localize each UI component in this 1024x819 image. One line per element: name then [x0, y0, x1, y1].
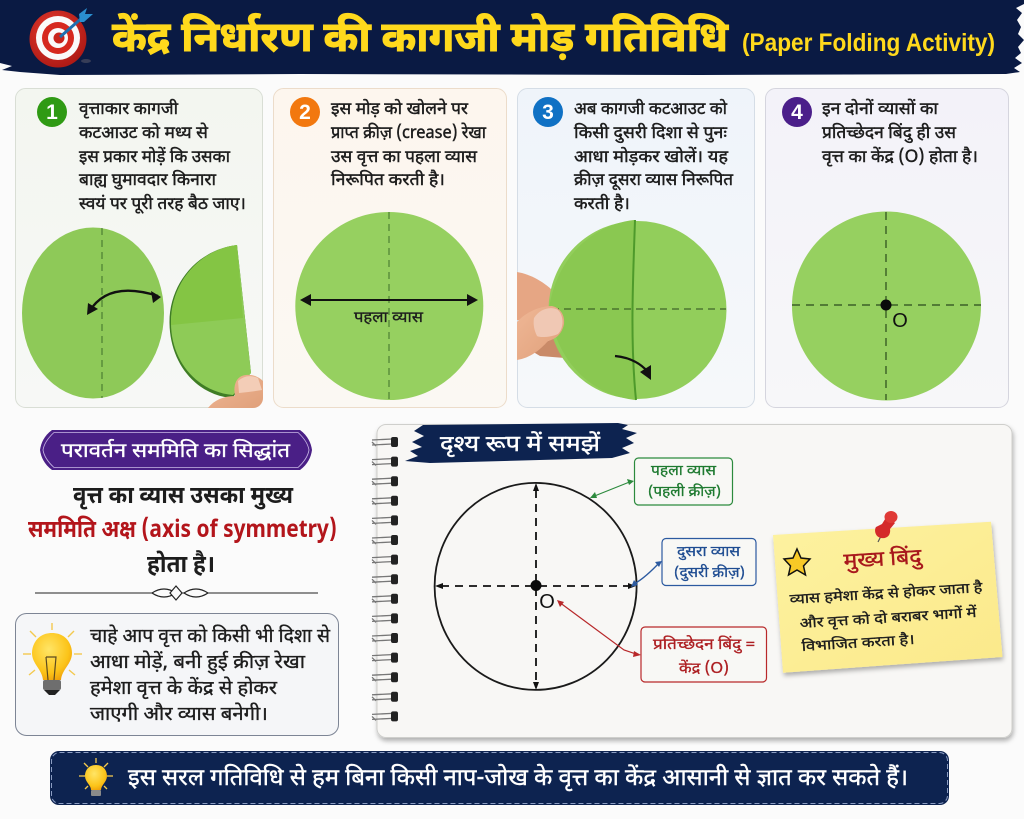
paper circle with first diameter [295, 212, 483, 400]
folded half circle [169, 245, 251, 398]
arrow: second diameter [631, 561, 662, 587]
subtitle: (Paper Folding Activity) [742, 29, 995, 57]
tip text: चाहे आप वृत्त को किसी भी दिशा से [90, 624, 331, 650]
step 1 text: कटआउट को मध्य से [79, 121, 209, 145]
step 2 text: निरूपित करती है। [331, 168, 445, 192]
icon: push pin [875, 511, 898, 542]
panel: step 3 [517, 88, 754, 408]
hand holding paper [208, 375, 263, 408]
main statement: होता है। [147, 550, 215, 582]
spiral binding [372, 437, 398, 721]
label: intersection point: केंद्र (O) [679, 659, 729, 680]
bottom takeaway bar [50, 751, 949, 805]
tip text [90, 624, 331, 728]
circle diagram [435, 483, 637, 690]
paper circle with fold line and arrow [22, 228, 164, 398]
panel: step 4 [766, 88, 1008, 408]
label: first diameter [634, 458, 732, 505]
key point text [789, 578, 984, 657]
step 4 text: प्रतिच्छेदन बिंदु ही उस [822, 121, 957, 145]
step 3 text: अब कागजी कटआउट को [574, 98, 728, 121]
step 2 text: प्राप्त क्रीज़ (crease) रेखा [331, 121, 487, 145]
circle diagram: O [539, 591, 555, 613]
main statement: सममिति अक्ष (axis of symmetry) [28, 515, 337, 547]
callout: tip box [16, 614, 338, 736]
arrow: intersection point [557, 600, 641, 657]
step number 3: 3 [542, 101, 554, 124]
step 2 text: इस मोड़ को खोलने पर [331, 97, 469, 121]
step 2 text: उस वृत्त का पहला व्यास [331, 147, 478, 169]
ornamental divider [35, 586, 318, 600]
label: second diameter [662, 538, 756, 586]
step number 1: 1 [46, 101, 58, 124]
heading: visual understanding: दृश्य रूप में समझें [440, 431, 600, 460]
main statement [28, 481, 337, 582]
icon: light bulb [79, 758, 113, 796]
step 3 text [574, 98, 733, 216]
paper circle with second fold [548, 220, 726, 400]
icon: star [784, 549, 810, 575]
step 3 text: किसी दुसरी दिशा से पुनः [574, 121, 728, 145]
step 4 text: इन दोनों व्यासों का [822, 98, 939, 121]
paper circle with both diameters and centre: O [892, 310, 908, 332]
heading: symmetry principle [40, 430, 312, 470]
panel: step 2 [274, 88, 506, 408]
tip text: जाएगी और व्यास बनेगी। [90, 702, 268, 728]
tip text: आधा मोड़ें, बनी हुई क्रीज़ रेखा [90, 650, 306, 676]
step 2 text [331, 97, 487, 192]
step number 3 [533, 97, 563, 127]
thumb holding paper [517, 306, 564, 360]
step 3 text: आधा मोड़कर खोलें। यह [574, 146, 729, 169]
step 3 text: करती है। [574, 192, 630, 216]
sticky note: key point [773, 511, 1002, 673]
step 1 text: स्वयं पर पूरी तरह बैठ जाए। [79, 192, 246, 216]
icon: target with arrow [30, 8, 93, 68]
key point heading: मुख्य बिंदु [843, 544, 924, 577]
heading: symmetry principle: परावर्तन सममिति का सिद्धांत [61, 438, 291, 466]
label: first diameter: पहला व्यास [651, 462, 717, 481]
tip text: हमेशा वृत्त के केंद्र से होकर [90, 676, 278, 702]
main statement: वृत्त का व्यास उसका मुख्य [73, 481, 294, 513]
step 1 text [79, 98, 246, 216]
step number 2 [290, 97, 320, 127]
key point text: विभाजित करता है। [801, 631, 915, 657]
label: intersection point [641, 627, 766, 682]
step number 4 [782, 97, 812, 127]
takeaway text: इस सरल गतिविधि से हम बिना किसी नाप-जोख के वृत्त का केंद्र आसानी से ज्ञात कर सकते हैं। [128, 764, 908, 795]
header banner [0, 0, 1024, 75]
key point text: और वृत्त को दो बराबर भागों में [799, 604, 978, 634]
step 4 text: वृत्त का केंद्र (O) होता है। [822, 145, 978, 169]
step 1 text: इस प्रकार मोड़ें कि उसका [79, 146, 231, 169]
step 3 text: क्रीज़ दूसरा व्यास निरूपित [574, 169, 733, 192]
key point text: व्यास हमेशा केंद्र से होकर जाता है [789, 578, 984, 610]
label: second diameter: दुसरा व्यास [677, 543, 741, 562]
step 4 text [822, 98, 978, 169]
icon: light bulb [23, 623, 82, 695]
step number 4: 4 [791, 101, 803, 124]
step 1 text: वृत्ताकार कागजी [79, 98, 179, 121]
panel: step 1 [16, 88, 263, 408]
step 1 text: बाह्य घुमावदार किनारा [79, 169, 217, 192]
step number 2: 2 [299, 101, 311, 124]
title: केंद्र निर्धारण की कागजी मोड़ गतिविधि [112, 13, 729, 69]
label: intersection point: प्रतिच्छेदन बिंदु = [653, 635, 755, 656]
panel: notebook diagram [372, 423, 1012, 738]
arrow: first diameter [590, 479, 634, 498]
fingers behind paper [517, 272, 565, 358]
label: second diameter: (दुसरी क्रीज़) [674, 564, 745, 583]
label: first diameter: (पहली क्रीज़) [648, 483, 721, 502]
heading: visual understanding [405, 423, 637, 463]
step number 1 [37, 97, 67, 127]
paper circle with first diameter: पहला व्यास [354, 310, 424, 329]
paper circle with both diameters and centre [792, 212, 981, 400]
